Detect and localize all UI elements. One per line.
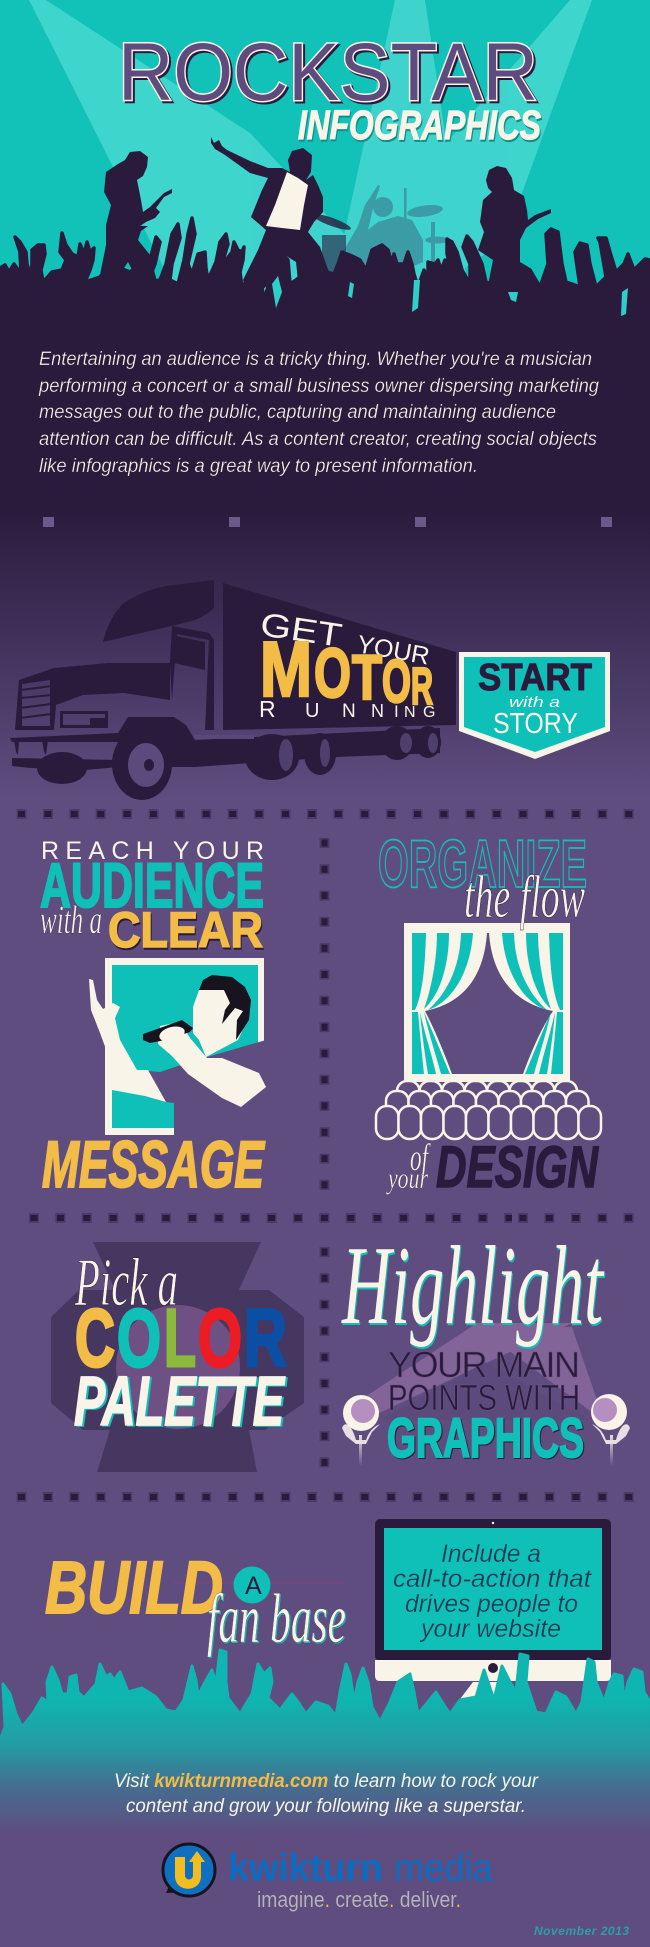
guitarist right	[478, 166, 551, 300]
heading: your main points with: POINTS WITH	[388, 1377, 580, 1418]
wordmark: kwikturn	[228, 1847, 383, 1890]
icon: stage light silhouette	[51, 1242, 304, 1472]
intro paragraph: performing a concert or a small business owner dispersing marketing	[38, 376, 599, 397]
heading: of your: your	[386, 1162, 428, 1195]
intro paragraph: Entertaining an audience is a tricky thing. Whether you're a musician	[39, 349, 592, 370]
intro paragraph	[38, 349, 599, 477]
call-to-action text: drives people to	[405, 1590, 578, 1618]
truck text: YOUR	[355, 630, 432, 671]
dotted dividers	[16, 814, 634, 1497]
heading: color: C	[75, 1293, 115, 1384]
icon: right spotlight	[591, 1394, 630, 1465]
truck text: R	[259, 696, 276, 722]
footer text: Visit kwikturnmedia.com to learn how to rock your	[114, 1770, 539, 1792]
heading: color: O	[117, 1293, 161, 1384]
crowd silhouette	[0, 218, 650, 330]
truck text: GET	[258, 605, 345, 654]
truck illustration	[10, 580, 456, 800]
singer	[211, 137, 340, 300]
heading: color: L	[164, 1293, 196, 1384]
heading: reach your: REACH YOUR	[41, 837, 264, 865]
call-to-action text: your website	[419, 1615, 561, 1643]
icon: speech bubble with u-turn arrow	[163, 1844, 215, 1896]
badge: a: A	[245, 1572, 262, 1600]
bottom crowd silhouette	[0, 1650, 650, 1835]
icon: left spotlight	[342, 1395, 380, 1465]
icon: singer with microphone	[89, 958, 266, 1136]
footer text	[114, 1770, 539, 1817]
heading: the flow: the flow	[464, 864, 585, 930]
intro paragraph: like infographics is a great way to present information.	[39, 456, 478, 477]
truck text: O	[382, 648, 411, 715]
truck text: N	[404, 704, 416, 721]
hero teal slivers in crowd	[272, 276, 628, 316]
footer text: content and grow your following like a superstar.	[126, 1795, 526, 1817]
call-to-action text: Include a	[441, 1540, 541, 1568]
truck text: U	[305, 700, 319, 722]
badge: start with a story: START	[478, 657, 592, 699]
truck text: N	[342, 701, 356, 722]
guitarist left	[98, 151, 172, 285]
truck text: I	[394, 702, 399, 721]
heading: your main points with: YOUR MAIN	[388, 1344, 580, 1385]
heading: audience: AUDIENCE	[40, 851, 264, 921]
spotlight beams	[365, 1323, 597, 1413]
drummer, translucent	[344, 185, 449, 310]
title: ROCKSTAR	[118, 27, 538, 118]
heading: build: BUILD	[45, 1546, 223, 1629]
heading: with a: with a	[40, 897, 102, 942]
heading: message: MESSAGE	[42, 1127, 265, 1201]
heading: clear: CLEAR	[108, 902, 263, 958]
icon: stage with curtains and audience	[376, 923, 601, 1139]
badge: start with a story: STORY	[493, 708, 578, 740]
tagline: imagine. create. deliver.	[257, 1887, 461, 1912]
truck text: M	[260, 625, 312, 713]
light beams	[29, 0, 592, 320]
intro paragraph: messages out to the public, capturing and maintaining audience	[39, 402, 556, 423]
decorative top dots	[43, 517, 612, 527]
icon: monitor with call to action	[375, 1519, 611, 1707]
call-to-action text: call-to-action that	[393, 1565, 592, 1593]
truck text: G	[423, 704, 435, 721]
panel: build a fan base	[45, 1546, 346, 1658]
panel: truck, get your motor running	[10, 580, 456, 800]
hero panel: concert stage	[0, 0, 650, 330]
title: INFOGRAPHICS	[298, 102, 541, 148]
badge: start with a story	[459, 652, 610, 759]
date: November 2013	[534, 1924, 629, 1938]
panel: pick a color palette	[51, 1242, 304, 1472]
heading: color	[75, 1293, 287, 1384]
heading: of your: of	[410, 1137, 431, 1179]
badge: start with a story: with a	[509, 694, 560, 711]
heading: color: O	[198, 1293, 242, 1384]
truck text: R	[411, 658, 433, 716]
heading: pick a: Pick a	[74, 1244, 178, 1320]
badge: a	[234, 1566, 270, 1604]
truck text: N	[371, 701, 384, 721]
truck text: O	[314, 634, 351, 712]
heading: palette: PALETTE	[74, 1362, 286, 1440]
truck text	[258, 605, 435, 722]
panel: reach your audience with a clear message	[40, 837, 266, 1201]
call-to-action text	[393, 1540, 592, 1643]
panel: highlight your main points with graphics	[341, 1224, 630, 1469]
logo: kwikturn media	[163, 1844, 493, 1912]
heading: fan base: fan base	[207, 1581, 346, 1658]
heading: of your	[386, 1137, 431, 1195]
heading: your main points with	[388, 1344, 580, 1418]
panel: organize the flow of your design	[376, 826, 601, 1200]
truck text: T	[352, 643, 382, 713]
logo: kwikturn media: media	[394, 1847, 493, 1890]
intro paragraph: attention can be difficult. As a content creator, creating social objects	[39, 429, 597, 450]
heading: color: R	[244, 1293, 287, 1384]
